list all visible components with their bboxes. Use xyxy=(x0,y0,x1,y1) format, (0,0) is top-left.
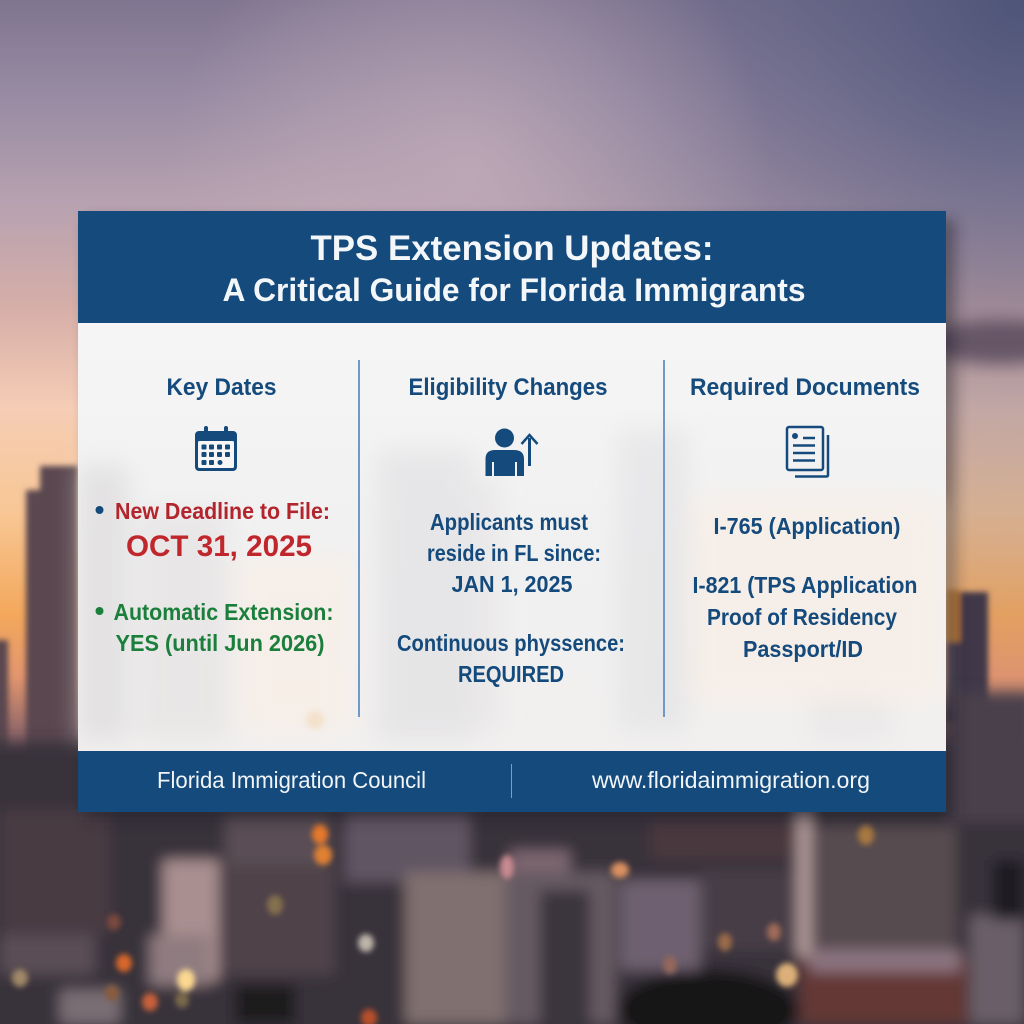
panel: eligibility changes xyxy=(397,374,625,687)
value: extension until: YES (until Jun 2026) xyxy=(116,630,324,656)
panel drop shadow xyxy=(86,219,956,820)
text: document list xyxy=(692,513,918,662)
text: residence requirement xyxy=(427,509,601,597)
column dividers xyxy=(358,360,665,717)
panel: key dates xyxy=(96,374,334,656)
bullet: new deadline xyxy=(96,506,104,514)
icon: calendar xyxy=(195,426,237,471)
text: continuous presence: Continuous physsence: xyxy=(397,630,625,656)
footer: organization: Florida Immigration Council xyxy=(157,767,426,793)
text: residence requirement: JAN 1, 2025 xyxy=(452,571,573,597)
title xyxy=(222,229,806,308)
title: TPS Extension Updates: xyxy=(310,229,714,268)
text: document list: I-765 (Application) xyxy=(714,513,900,539)
header banner xyxy=(78,211,946,323)
text: residence requirement: reside in FL since: xyxy=(427,540,601,566)
footer banner xyxy=(78,751,946,812)
heading: key dates: Key Dates xyxy=(166,374,276,401)
bullet: automatic extension xyxy=(96,607,104,615)
text: continuous presence xyxy=(397,630,625,687)
text: document list: Passport/ID xyxy=(743,636,863,662)
label: automatic extension: Automatic Extension: xyxy=(114,599,334,625)
panel: required documents xyxy=(690,374,920,662)
text: document list: I-821 (TPS Application xyxy=(692,572,918,598)
footer: website: www.floridaimmigration.org xyxy=(591,767,870,793)
text: residence requirement: Applicants must xyxy=(430,509,588,535)
label: new deadline: New Deadline to File: xyxy=(115,498,330,524)
heading: eligibility changes: Eligibility Changes xyxy=(408,374,608,401)
infographic card xyxy=(78,211,946,812)
heading: required documents: Required Documents xyxy=(690,374,920,401)
text: document list: Proof of Residency xyxy=(707,604,897,630)
title: A Critical Guide for Florida Immigrants xyxy=(222,272,806,308)
date: deadline: OCT 31, 2025 xyxy=(126,530,312,563)
content panel background with ghost skyline xyxy=(78,323,946,751)
icon: person with up arrow xyxy=(486,428,538,476)
icon: documents xyxy=(787,427,828,476)
text: continuous presence: REQUIRED xyxy=(458,661,564,687)
